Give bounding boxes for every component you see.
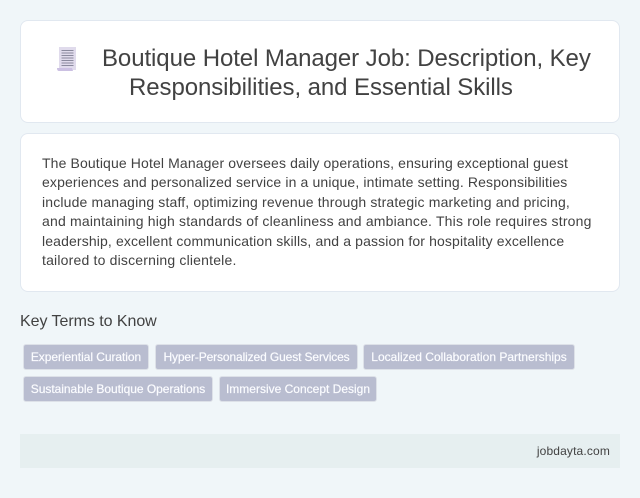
tag: Experiential Curation <box>23 344 149 370</box>
text block: description <box>42 155 592 268</box>
tag: Immersive Concept Design <box>219 376 377 402</box>
footer text: site name: jobdayta.com <box>537 444 610 458</box>
tag: Localized Collaboration Partnerships: Localized Collaboration Partnerships <box>371 350 567 364</box>
tag: Experiential Curation: Experiential Curation <box>31 350 141 364</box>
text: leadership, excellent communication skills, and a passion for hospitality excellence <box>42 233 564 249</box>
text: and maintaining high standards of cleanliness and ambiance. This role requires strong <box>42 213 592 229</box>
tag: Hyper-Personalized Guest Services: Hyper-Personalized Guest Services <box>163 350 350 364</box>
text: Boutique Hotel Manager Job: Description, Key <box>102 45 591 72</box>
panel: title card <box>20 20 620 123</box>
tag: Hyper-Personalized Guest Services <box>155 344 358 370</box>
text: tailored to discerning clientele. <box>42 252 237 268</box>
icon: document scroll <box>57 47 76 71</box>
heading: key terms: Key Terms to Know <box>20 313 157 330</box>
tag: Localized Collaboration Partnerships <box>363 344 575 370</box>
footer bar <box>20 434 620 468</box>
heading: title <box>102 45 591 101</box>
panel: description card <box>20 133 620 292</box>
tag: Immersive Concept Design: Immersive Concept Design <box>226 382 370 396</box>
text: The Boutique Hotel Manager oversees daily operations, ensuring exceptional guest <box>42 155 568 171</box>
text: experiences and personalized service in a unique, intimate setting. Responsibilities <box>42 174 567 190</box>
text: Responsibilities, and Essential Skills <box>129 74 513 101</box>
tag: Sustainable Boutique Operations <box>23 376 213 402</box>
text: include managing staff, optimizing revenue through strategic marketing and pricing, <box>42 194 570 210</box>
tag: Sustainable Boutique Operations: Sustainable Boutique Operations <box>31 382 205 396</box>
